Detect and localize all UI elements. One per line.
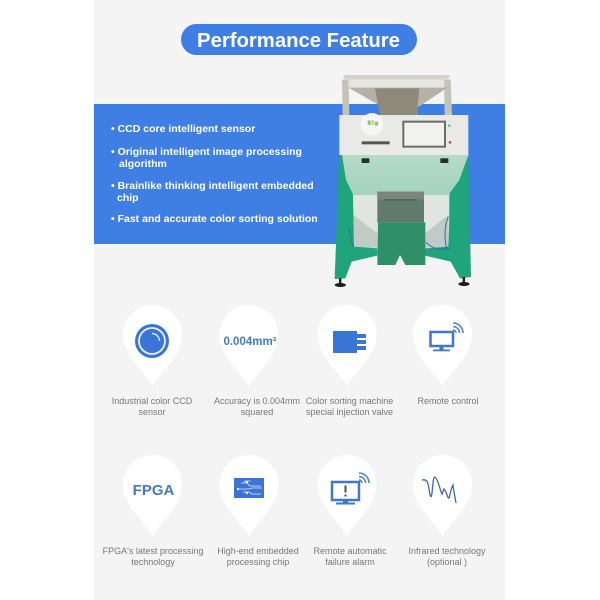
feature: accuracy: Accuracy is 0.004mm bbox=[214, 396, 300, 406]
icon: circuit board bbox=[234, 478, 264, 498]
feature list: algorithm bbox=[119, 158, 167, 170]
control box bbox=[339, 113, 468, 155]
feature: remote control bbox=[413, 305, 479, 406]
feature list: • CCD core intelligent sensor bbox=[111, 123, 255, 135]
feature: accuracy: 0.004mm² bbox=[223, 336, 277, 348]
feature list: • Brainlike thinking intelligent embedded bbox=[111, 180, 314, 192]
panel: blue feature band bbox=[94, 104, 505, 244]
feature: injection valve: Color sorting machine bbox=[306, 396, 393, 406]
feature: accuracy bbox=[214, 305, 300, 417]
feature: FPGA: technology bbox=[131, 557, 175, 567]
feature: remote control: Remote control bbox=[417, 396, 479, 406]
feature: failure alarm: Remote automatic bbox=[313, 546, 387, 556]
feature: embedded chip bbox=[217, 455, 299, 567]
feature: infrared: (optional ) bbox=[427, 557, 467, 567]
feature: infrared: Infrared technology bbox=[408, 546, 486, 556]
feature: embedded chip: processing chip bbox=[227, 557, 289, 567]
feature: failure alarm: failure alarm bbox=[325, 557, 375, 567]
icon: infrared waveform bbox=[422, 477, 456, 503]
feet bbox=[335, 277, 470, 287]
icon: alarm monitor bbox=[332, 473, 369, 504]
chute bbox=[377, 192, 425, 265]
icon: monitor with signal bbox=[430, 323, 463, 351]
lower grey cabinet bbox=[352, 193, 449, 248]
icon: lens bbox=[135, 324, 169, 358]
title bbox=[181, 24, 417, 55]
feature: FPGA: FPGA bbox=[133, 482, 174, 499]
feature: infrared bbox=[408, 455, 486, 567]
machine illustration bbox=[335, 75, 471, 287]
feature list: • Original intelligent image processing bbox=[111, 146, 302, 158]
hopper bbox=[342, 75, 452, 115]
page background panel bbox=[94, 0, 505, 600]
feature: injection valve: special injection valve bbox=[306, 407, 393, 417]
feature: accuracy: squared bbox=[241, 407, 273, 417]
upper green body bbox=[342, 154, 469, 195]
air hoses bbox=[349, 217, 450, 249]
feature: failure alarm bbox=[313, 455, 387, 567]
feature: FPGA: FPGA's latest processing bbox=[103, 546, 203, 556]
feature: embedded chip: High-end embedded bbox=[217, 546, 299, 556]
title: Performance Feature bbox=[197, 30, 400, 52]
feature list: • Fast and accurate color sorting solution bbox=[111, 213, 318, 225]
feature: CCD sensor: sensor bbox=[138, 407, 166, 417]
icon: valve bbox=[333, 331, 366, 353]
feature list: chip bbox=[117, 192, 139, 204]
feature: FPGA bbox=[103, 455, 203, 567]
feature: CCD sensor bbox=[112, 305, 193, 417]
feature: injection valve bbox=[306, 305, 393, 417]
green frame bbox=[335, 155, 471, 279]
feature list bbox=[111, 123, 318, 225]
feature: CCD sensor: Industrial color CCD bbox=[112, 396, 193, 406]
